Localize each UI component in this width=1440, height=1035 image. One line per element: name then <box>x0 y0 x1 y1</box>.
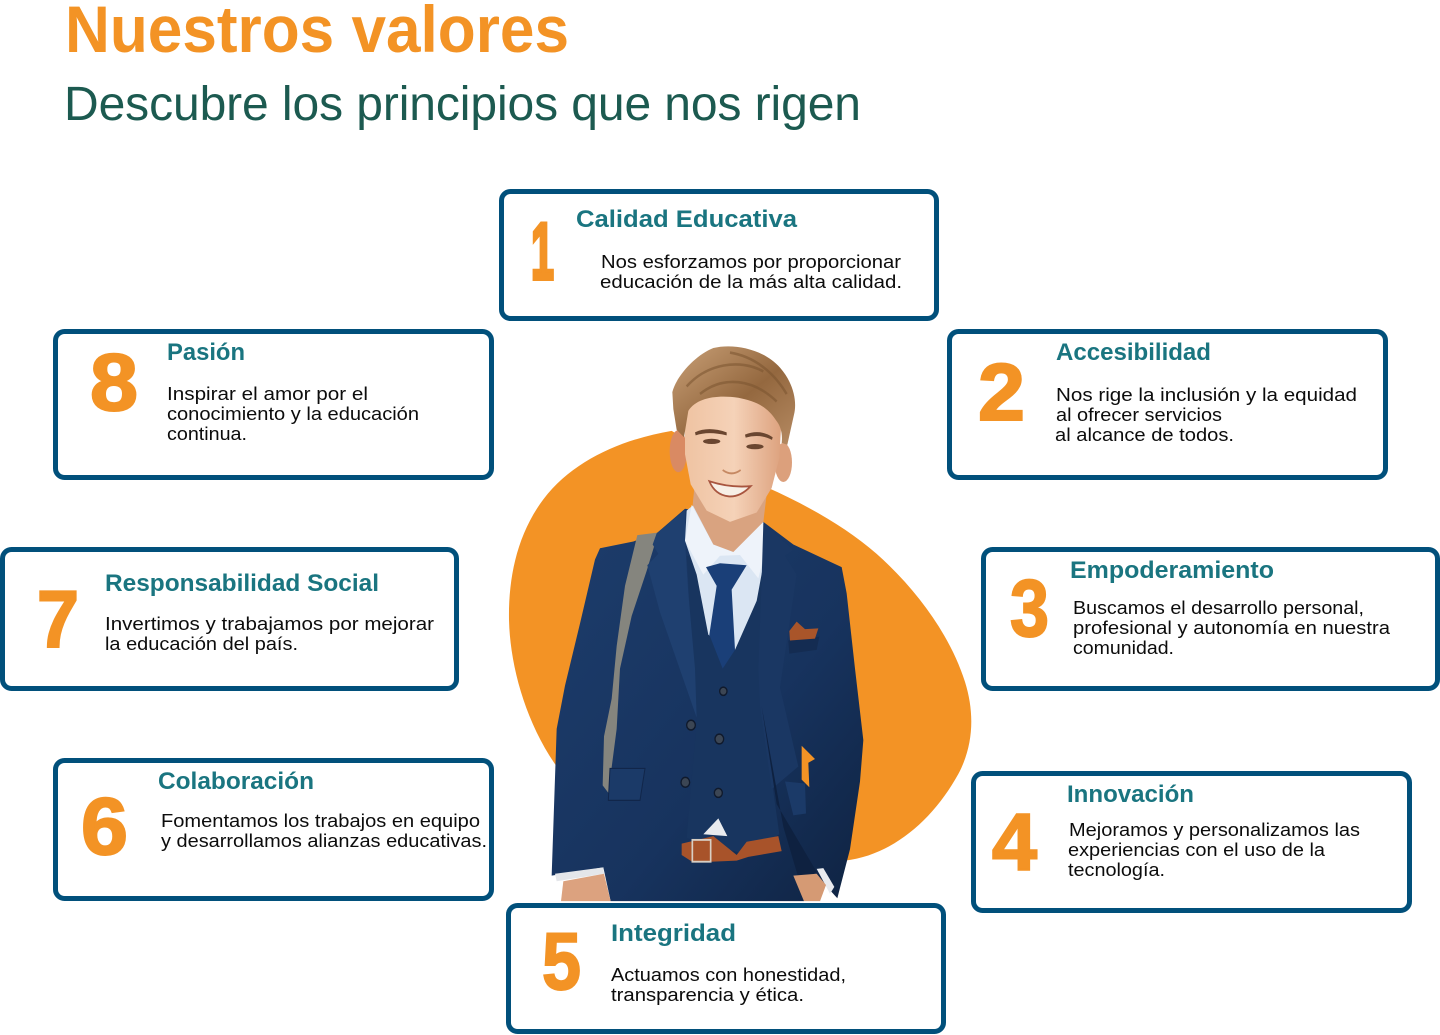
orange blob <box>509 431 971 876</box>
pocket square <box>789 622 818 640</box>
neck <box>692 490 766 552</box>
description: Fomentamos los trabajos en equipo <box>161 810 480 831</box>
description: experiencias con el uso de la <box>1068 839 1326 860</box>
description: Invertimos y trabajamos por mejorar <box>105 613 434 634</box>
description: educación de la más alta calidad. <box>600 271 902 292</box>
description: conocimiento y la educación <box>167 403 419 424</box>
number 1: 1 <box>531 207 554 297</box>
description <box>1055 384 1357 445</box>
number 8: 8 <box>90 338 138 428</box>
heading: Calidad Educativa <box>576 206 798 233</box>
hair <box>672 346 795 445</box>
cuff right <box>817 868 834 894</box>
jacket buttons <box>681 687 727 797</box>
face <box>685 386 783 522</box>
number 3: 3 <box>1010 564 1049 654</box>
description: la educación del país. <box>105 633 298 654</box>
description: al ofrecer servicios <box>1056 404 1222 425</box>
breast pocket <box>788 637 819 654</box>
nose <box>723 470 741 473</box>
card 1 <box>502 192 936 318</box>
heading: Colaboración <box>158 768 314 795</box>
pocket flap right <box>785 782 806 815</box>
right lapel <box>758 524 798 789</box>
description: Buscamos el desarrollo personal, <box>1073 597 1364 618</box>
tie <box>706 563 747 669</box>
jacket dark edge <box>762 706 817 883</box>
heading: Innovación <box>1067 781 1194 808</box>
description: transparencia y ética. <box>611 984 804 1005</box>
heading: Accesibilidad <box>1056 339 1211 366</box>
number 7: 7 <box>37 575 79 665</box>
left lapel <box>647 510 697 718</box>
card 6 <box>56 760 492 898</box>
card 8 <box>56 332 492 478</box>
description: Inspirar el amor por el <box>167 383 368 404</box>
description: comunidad. <box>1073 637 1174 658</box>
pocket flap left <box>608 768 645 800</box>
card 7 <box>2 550 456 688</box>
shirt <box>685 505 765 650</box>
card 3 <box>984 550 1438 688</box>
number 2: 2 <box>978 348 1025 438</box>
heading: Responsabilidad Social <box>105 570 379 597</box>
cuff left <box>555 867 604 881</box>
description <box>1073 597 1391 658</box>
vest <box>723 784 779 852</box>
belt <box>682 836 782 862</box>
description: tecnología. <box>1068 859 1165 880</box>
hand right <box>793 874 826 901</box>
shirt gap <box>703 818 727 836</box>
collar <box>685 505 765 578</box>
smile <box>709 481 751 496</box>
number 4: 4 <box>992 798 1037 888</box>
hand left <box>561 874 611 901</box>
description <box>1068 819 1360 880</box>
description: continua. <box>167 423 247 444</box>
number 5: 5 <box>542 917 581 1007</box>
heading: Pasión <box>167 339 245 366</box>
description: Nos rige la inclusión y la equidad <box>1056 384 1357 405</box>
description: y desarrollamos alianzas educativas. <box>161 830 487 851</box>
eyebrows and eyes <box>695 429 773 449</box>
card 4 <box>974 774 1410 910</box>
arm gap <box>802 746 815 787</box>
description <box>161 810 487 851</box>
card 2 <box>950 332 1386 478</box>
heading: Integridad <box>611 920 736 947</box>
jacket <box>552 509 863 901</box>
heading: Empoderamiento <box>1070 557 1274 584</box>
card 5 <box>508 906 944 1032</box>
description: Mejoramos y personalizamos las <box>1069 819 1360 840</box>
subtitle: Descubre los principios que nos rigen <box>64 78 861 131</box>
description: Nos esforzamos por proporcionar <box>601 251 901 272</box>
description <box>167 383 419 444</box>
number 6: 6 <box>81 782 128 872</box>
description: Actuamos con honestidad, <box>611 964 846 985</box>
belt buckle <box>692 840 711 862</box>
description: profesional y autonomía en nuestra <box>1073 617 1391 638</box>
ears <box>670 430 687 472</box>
description <box>105 613 434 654</box>
description: al alcance de todos. <box>1055 424 1234 445</box>
description <box>611 964 846 1005</box>
illustration: student on orange blob <box>509 346 971 901</box>
shoulder strap <box>603 532 658 793</box>
description <box>600 251 902 292</box>
